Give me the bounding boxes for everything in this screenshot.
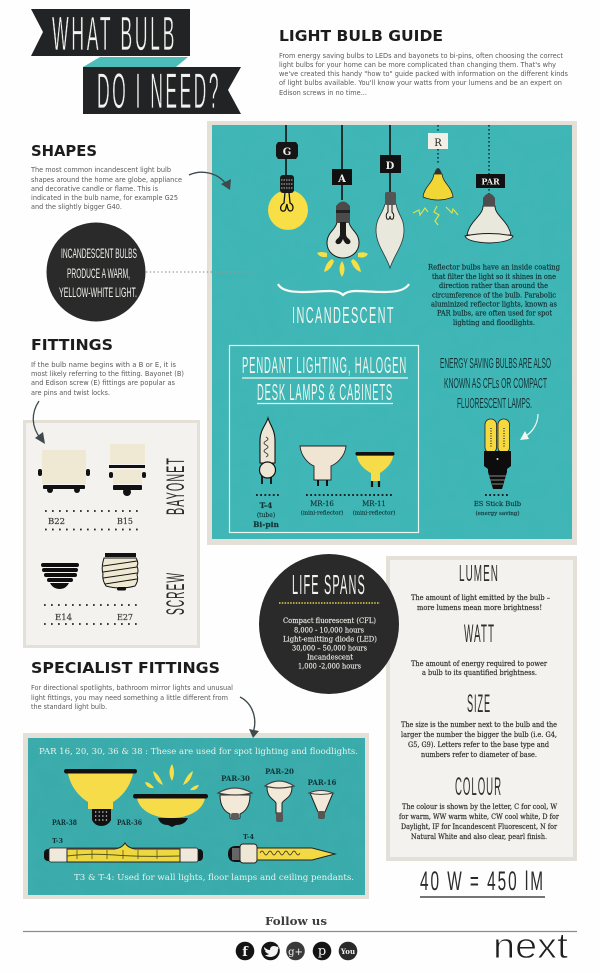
bulb: G globe bbox=[268, 125, 308, 230]
brace bbox=[278, 284, 409, 295]
labels: T-4, MR-16, MR-11: T-4 bbox=[260, 501, 272, 510]
title banner: What Bulb Do I Need? bbox=[31, 8, 241, 119]
icons: social media: f bbox=[242, 945, 249, 960]
text: reflector bulbs: aluminized reflector lights, known as bbox=[431, 300, 557, 308]
specialist fittings section text: SPECIALIST FITTINGS bbox=[31, 659, 220, 677]
label: ES stick bulb: ES Stick Bulb bbox=[474, 500, 522, 508]
icons: social media: g+ bbox=[288, 947, 303, 958]
text: DO I NEED? bbox=[97, 63, 221, 119]
labels: T-4, MR-16, MR-11: (mini-reflector) bbox=[301, 510, 343, 516]
callout: life spans bbox=[259, 554, 399, 694]
callout: life spans: Light-emitting diode (LED) bbox=[283, 634, 377, 644]
bulb: T-4 bi-pin bbox=[260, 418, 276, 484]
bulb: R reflector bbox=[413, 125, 458, 225]
text: reflector bulbs bbox=[428, 262, 560, 327]
intro: light bulb guide: we've created this handy "how to" guide packed with information on the different kinds bbox=[279, 69, 568, 78]
arrow: fittings bbox=[33, 401, 45, 444]
labels: fitting codes: B22 bbox=[48, 517, 65, 527]
bulb: R reflector: R bbox=[434, 138, 442, 149]
footer: follow us: Follow us bbox=[265, 915, 327, 928]
definition: lumen: more lumens mean more brightness! bbox=[417, 603, 542, 612]
labels: PAR-38 and PAR-36: PAR-38 bbox=[52, 818, 77, 827]
definition: colour: The colour is shown by the letter, C for cool, W bbox=[402, 802, 558, 811]
shapes section text: and decorative candle or flame. This is bbox=[31, 184, 158, 193]
bulb: MR-11 bbox=[356, 452, 394, 487]
text: reflector bulbs: PAR bulbs, are often used for spot bbox=[437, 308, 552, 318]
labels: T-4, MR-16, MR-11: (tube) bbox=[257, 512, 275, 519]
fittings section text: If the bulb name begins with a B or E, it is bbox=[31, 360, 176, 369]
label: ES stick bulb: (energy saving) bbox=[475, 510, 520, 517]
fittings section text: FITTINGS bbox=[31, 336, 113, 354]
logo: next: next bbox=[493, 925, 568, 966]
definition: size: The size is the number next to the bulb and the bbox=[401, 720, 557, 729]
bulb: ES stick bbox=[484, 419, 511, 489]
text: reflector bulbs: lighting and floodlights. bbox=[453, 318, 535, 327]
panel: definitions bbox=[386, 556, 577, 861]
labels: PAR-38 and PAR-36 bbox=[52, 818, 142, 827]
definition: colour: for warm, WW warm white, CW cool white, D for bbox=[399, 812, 559, 821]
labels: T-4, MR-16, MR-11: (mini-reflector) bbox=[353, 510, 395, 516]
specialist fittings section text: light fittings, you may need something a little different from bbox=[31, 693, 228, 702]
labels: fitting codes: E27 bbox=[117, 613, 133, 623]
text: reflector bulbs: direction rather than around the bbox=[439, 281, 548, 290]
text: energy saving bulbs bbox=[440, 355, 551, 412]
panel: fittings: BAYONET bbox=[162, 457, 190, 515]
bulb: PAR-30 bbox=[218, 774, 252, 820]
callout: incandescent bulbs bbox=[46, 222, 255, 322]
bulb: PAR bbox=[465, 125, 513, 243]
bulb: PAR-36 bbox=[133, 764, 208, 827]
definition: colour: COLOUR bbox=[455, 773, 502, 801]
definition: watt: The amount of energy required to power bbox=[411, 659, 548, 668]
panel: incandescent teal panel bbox=[207, 121, 577, 545]
labels: T-4, MR-16, MR-11 bbox=[253, 495, 395, 529]
arrow: shapes to bulbs bbox=[189, 172, 231, 190]
specialist fittings section text bbox=[31, 659, 233, 711]
definition: colour: Natural White and also clear, pearl finish. bbox=[411, 832, 547, 841]
icon: E27 bbox=[102, 553, 138, 590]
fittings section text: are pins and twist locks. bbox=[31, 388, 110, 397]
bulb: MR-16 bbox=[300, 446, 346, 486]
definition: lumen bbox=[411, 560, 550, 612]
icon: E14 bbox=[41, 563, 79, 589]
labels: T-4, MR-16, MR-11: Bi-pin bbox=[253, 520, 279, 529]
callout: life spans: Incandescent bbox=[307, 652, 353, 662]
labels: fitting codes: B15 bbox=[117, 517, 133, 527]
bulb: A appliance: A bbox=[337, 174, 346, 185]
definition: watt bbox=[411, 620, 548, 677]
panel: fittings: SCREW bbox=[162, 572, 190, 615]
callout: life spans: 8,000 - 10,000 hours bbox=[294, 626, 364, 634]
fittings section text bbox=[31, 336, 184, 397]
definition: lumen: LUMEN bbox=[459, 560, 499, 586]
shapes section text: indicated in the bulb name, for example G25 bbox=[31, 193, 178, 202]
definition: lumen: The amount of light emitted by the bulb – bbox=[411, 593, 550, 602]
callout: incandescent bulbs: PRODUCE A WARM, bbox=[67, 265, 130, 281]
text: reflector bulbs: circumference of the bulb. Parabolic bbox=[432, 290, 556, 300]
intro: light bulb guide bbox=[279, 27, 568, 97]
labels: PAR-38 and PAR-36: PAR-36 bbox=[117, 818, 142, 827]
shapes section text: shapes around the home are globe, appliance bbox=[31, 175, 182, 184]
icon: B15 bbox=[109, 444, 146, 496]
intro: light bulb guide: of light bulbs available. You'll know your watts from your lumens and be an expert on bbox=[279, 78, 562, 87]
panel: fittings bbox=[23, 420, 200, 648]
labels: fitting codes bbox=[44, 511, 139, 624]
definition: colour: Daylight, IF for Incandescent Fluorescent, N for bbox=[401, 822, 557, 831]
formula: 40 W = 450 lm bbox=[420, 866, 545, 897]
definition: size bbox=[401, 690, 557, 759]
bulb: PAR-16 bbox=[308, 778, 336, 819]
icon: B22 bbox=[38, 450, 90, 493]
bulb: PAR-30: PAR-30 bbox=[221, 774, 250, 783]
text: T3 and T4 use: T3 & T-4: Used for wall lights, floor lamps and ceiling pendants. bbox=[74, 873, 354, 883]
panel: specialist fittings bbox=[23, 733, 369, 899]
bulb: PAR-20: PAR-20 bbox=[265, 767, 294, 776]
definition: size: SIZE bbox=[467, 690, 491, 718]
specialist fittings section text: the standard light bulb. bbox=[31, 702, 107, 711]
labels: fitting codes: E14 bbox=[55, 613, 72, 623]
text: PAR use: PAR 16, 20, 30, 36 & 38 : These are used for spot lighting and floodlights. bbox=[39, 747, 358, 757]
icons: social media bbox=[236, 942, 357, 960]
text: reflector bulbs: that filter the light so it shines in one bbox=[432, 272, 556, 281]
icons: social media: p bbox=[318, 944, 326, 959]
bulb: PAR-38 bbox=[64, 769, 137, 826]
bulb: A appliance bbox=[317, 125, 368, 277]
shapes section text: SHAPES bbox=[31, 142, 97, 160]
icons: social media: You bbox=[340, 947, 355, 956]
intro: light bulb guide: From energy saving bulbs to LEDs and bayonets to bi-pins, often choosing the correct bbox=[279, 51, 563, 60]
definition: watt: a bulb to its quantified brightness. bbox=[422, 668, 537, 677]
definition: size: G5, G9). Letters refer to the base type and bbox=[408, 740, 549, 749]
title banner: What Bulb Do I Need?: WHAT BULB bbox=[52, 8, 177, 61]
specialist fittings section text: For directional spotlights, bathroom mirror lights and unusual bbox=[31, 683, 233, 692]
callout: incandescent bulbs: INCANDESCENT BULBS bbox=[61, 245, 137, 261]
arrow: specialist fittings bbox=[240, 697, 259, 738]
bulb: G globe: G bbox=[283, 147, 291, 158]
bulb: T-3: T-3 bbox=[52, 837, 63, 845]
shapes section text: and the slightly bigger G40. bbox=[31, 202, 122, 211]
bulb: T-3 bbox=[44, 837, 203, 862]
labels: T-4, MR-16, MR-11: MR-16 bbox=[310, 500, 334, 508]
intro: light bulb guide: Edison screws in no time... bbox=[279, 88, 367, 97]
callout: life spans: 1,000 -2,000 hours bbox=[298, 662, 361, 670]
callout: life spans: LIFE SPANS bbox=[292, 569, 366, 600]
bulb: D decorative flame: D bbox=[386, 161, 395, 172]
callout: life spans: 30,000 – 50,000 hours bbox=[292, 644, 367, 652]
shapes section text: The most common incandescent light bulb bbox=[30, 165, 171, 174]
bulb: PAR: PAR bbox=[481, 176, 500, 186]
intro: light bulb guide: LIGHT BULB GUIDE bbox=[279, 27, 443, 45]
arrow: energy saving bbox=[520, 414, 538, 440]
bulb: T-4 capsule bbox=[228, 833, 335, 863]
box: pendant lighting bbox=[230, 346, 418, 532]
definition: size: numbers refer to diameter of base. bbox=[421, 750, 537, 759]
labels: T-4, MR-16, MR-11: MR-11 bbox=[362, 500, 386, 508]
fittings section text: and Edison screw (E) fittings are popular as bbox=[31, 378, 175, 387]
label: ES stick bulb bbox=[474, 495, 522, 517]
bulb: T-4 capsule: T-4 bbox=[243, 833, 254, 841]
callout: life spans: Compact fluorescent (CFL) bbox=[283, 616, 376, 625]
intro: light bulb guide: light bulbs for your home can be more complicated than changing them. That's why bbox=[279, 60, 557, 69]
fittings section text: most likely referring to the fitting. Bayonet (B) bbox=[31, 369, 184, 378]
bulb: D decorative flame bbox=[376, 125, 404, 268]
definition: size: larger the number the bigger the bulb (i.e. G4, bbox=[401, 730, 557, 739]
panel: incandescent teal panel: DESK LAMPS & CABINETS bbox=[257, 379, 393, 405]
definition: colour bbox=[399, 773, 559, 841]
text: reflector bulbs: Reflector bulbs have an inside coating bbox=[428, 262, 560, 272]
bulb: PAR-16: PAR-16 bbox=[308, 778, 336, 787]
callout: incandescent bulbs: YELLOW-WHITE LIGHT. bbox=[59, 284, 137, 300]
bulb: PAR-20 bbox=[265, 767, 294, 822]
definition: watt: WATT bbox=[464, 620, 495, 648]
panel: incandescent teal panel: INCANDESCENT bbox=[292, 302, 395, 328]
shapes section text bbox=[30, 142, 182, 211]
